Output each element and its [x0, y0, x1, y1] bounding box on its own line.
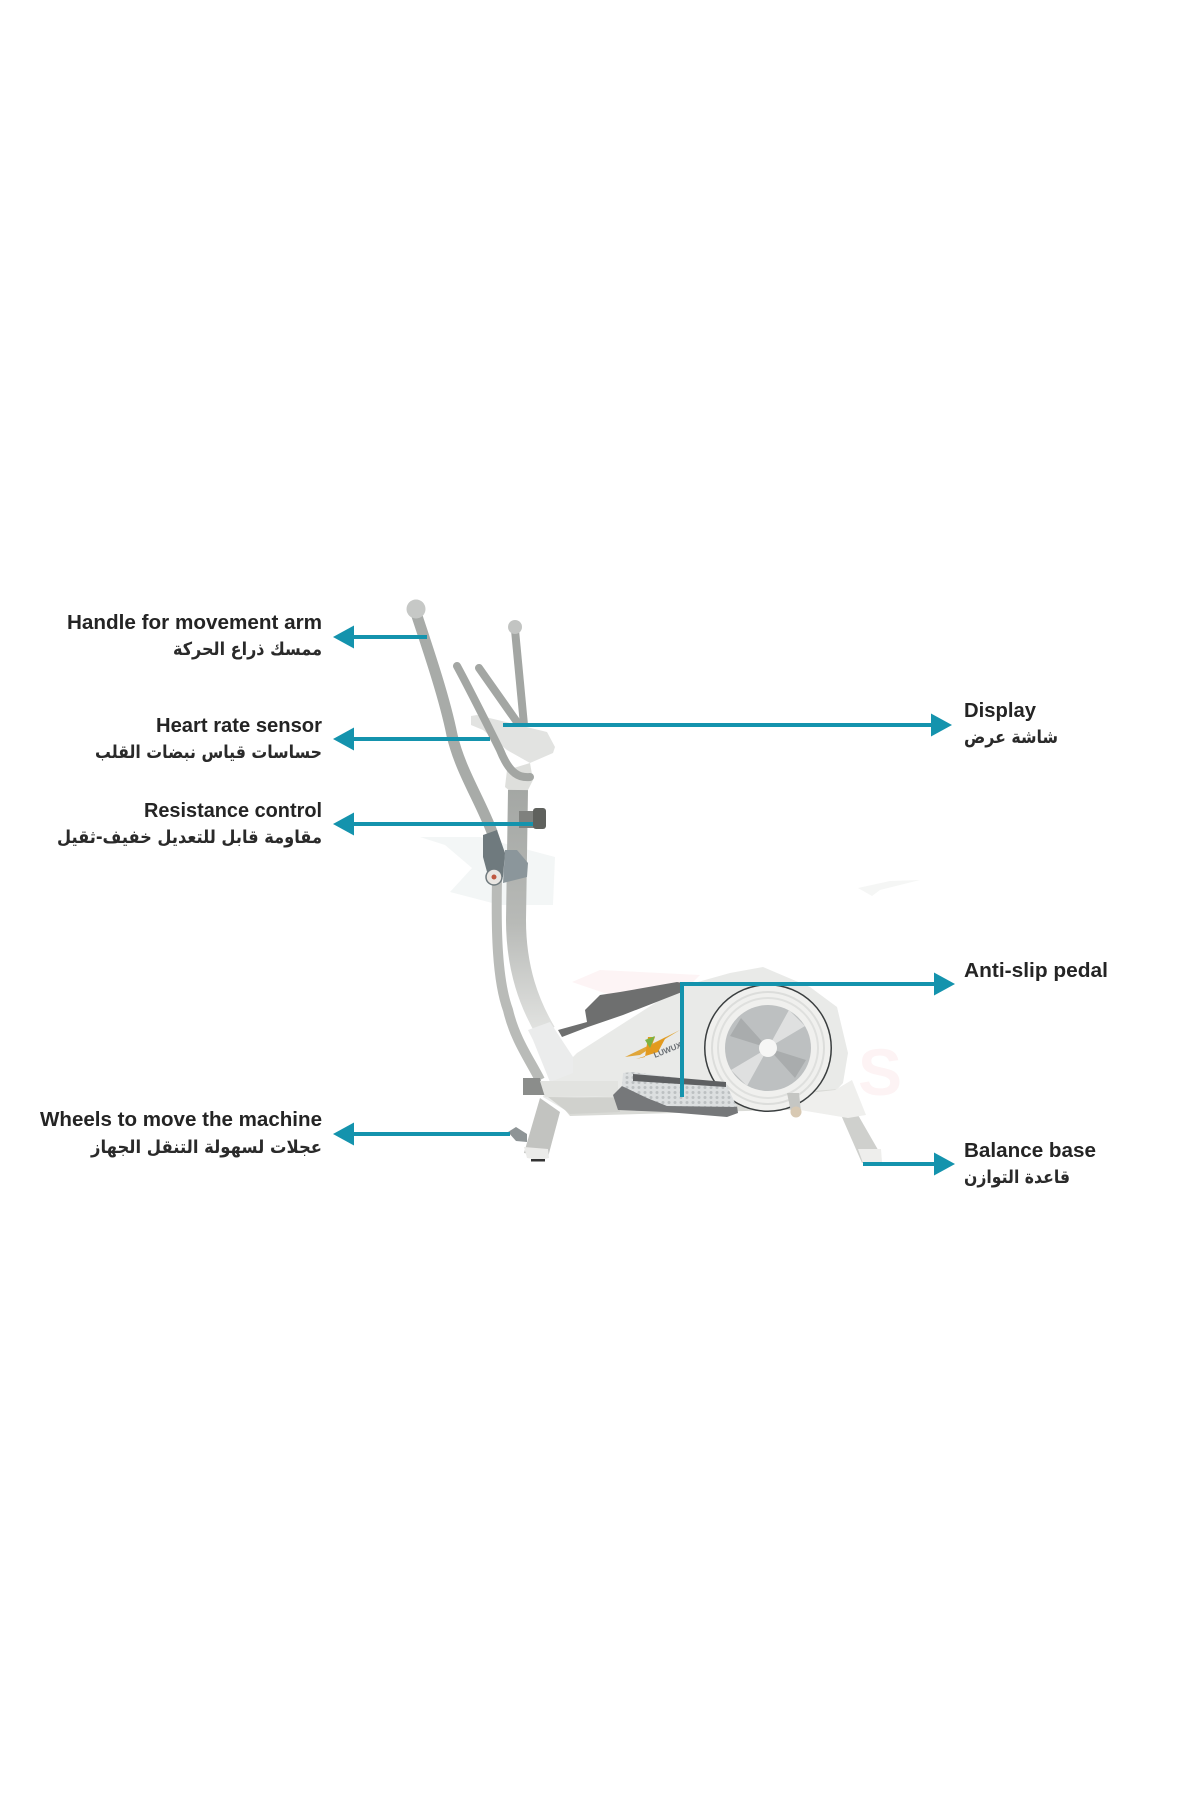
label text: Handle for movement arm: [67, 612, 322, 634]
callout: display: [503, 700, 1058, 748]
label text: [95, 715, 322, 763]
rear pivot knob: [787, 1093, 802, 1118]
label text: شاشة عرض: [964, 727, 1058, 748]
label text: عجلات لسهولة التنقل الجهاز: [90, 1137, 322, 1158]
console display: [471, 715, 555, 763]
callout: wheels to move the machine: [40, 1109, 510, 1158]
transport wheel: [508, 1127, 527, 1142]
rear balance base: [838, 1108, 882, 1163]
label text: حساسات قياس نبضات القلب: [95, 742, 322, 763]
label text: ممسك ذراع الحركة: [173, 639, 322, 660]
lower frame connector: [528, 1022, 573, 1082]
arrow: [333, 626, 427, 648]
main frame body: [543, 967, 866, 1118]
arrow: [333, 1122, 510, 1146]
arrow: [503, 714, 952, 736]
label text: مقاومة قابل للتعديل خفيف-ثقيل: [57, 827, 322, 848]
front base bracket: [523, 1078, 620, 1114]
brand logo: [625, 1030, 684, 1060]
label text: Balance base: [964, 1140, 1096, 1162]
resistance knob: [519, 808, 546, 829]
label text: Anti-slip pedal: [964, 960, 1108, 982]
label text: Heart rate sensor: [156, 715, 322, 737]
label text: Wheels to move the machine: [40, 1109, 322, 1131]
lower moving arm tube: [497, 880, 540, 1080]
arrow: [333, 812, 533, 836]
callout: heart rate sensor: [95, 715, 490, 763]
faint background watermarks: [420, 837, 920, 1109]
rear upright handle: [508, 620, 524, 725]
callout: resistance control: [57, 800, 533, 848]
arrow: [682, 972, 955, 1097]
callout: anti-slip pedal: [682, 960, 1108, 1097]
arrow: [863, 1152, 955, 1176]
label text: Resistance control: [144, 800, 322, 822]
short fixed handlebars: [479, 668, 517, 722]
arrow: [333, 728, 490, 750]
dark rail cover: [558, 982, 683, 1037]
label text: [57, 800, 322, 848]
label text: [964, 1140, 1096, 1188]
lower handlebar: [457, 666, 530, 777]
anti-slip pedal: [613, 1072, 738, 1117]
pivot joint: [483, 830, 528, 885]
label text: Display: [964, 700, 1037, 722]
column neck: [505, 763, 533, 792]
front balance base: [524, 1098, 560, 1162]
handle arm: front moving arm: [406, 600, 492, 832]
label text: [40, 1109, 322, 1158]
callout: handle for movement arm: [67, 612, 427, 660]
faint background watermarks: S: [858, 1035, 902, 1109]
callout: balance base: [863, 1140, 1096, 1188]
label text: قاعدة التوازن: [964, 1167, 1070, 1188]
brand logo: LUWUX: [652, 1040, 684, 1060]
label text: [67, 612, 322, 660]
elliptical machine illustration: [406, 600, 882, 1163]
label text: [964, 700, 1058, 748]
main column tube: [516, 790, 546, 1032]
flywheel: [704, 984, 832, 1112]
